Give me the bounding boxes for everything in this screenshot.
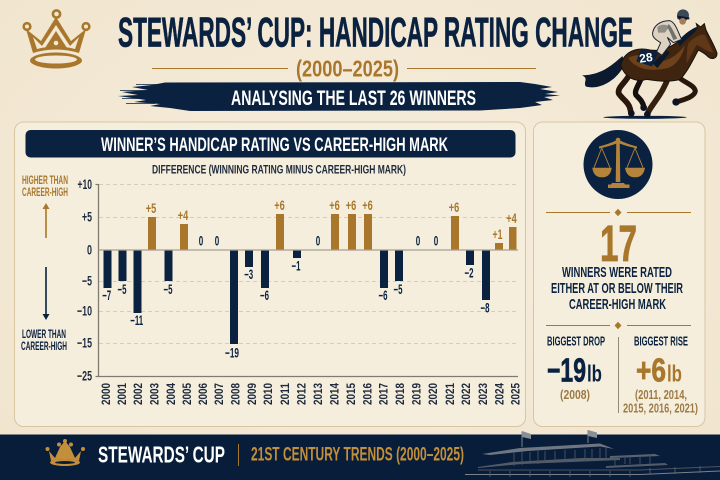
brush banner: analysing the last 26 winners: ANALYSING THE LAST 26 WINNERS [231, 87, 476, 110]
y axis labels: −15 [77, 336, 92, 350]
stat: biggest drop: BIGGEST DROP [547, 334, 605, 348]
icon: scales of justice [584, 130, 652, 199]
brush banner: analysing the last 26 winners [118, 82, 560, 111]
x axis year labels: 2013 [313, 383, 325, 405]
stat: biggest drop: −19 [547, 352, 586, 389]
negative value labels: −5 [118, 282, 127, 297]
stat: biggest rise: lb [667, 361, 682, 387]
y axis labels: +5 [82, 210, 92, 224]
x axis year labels: 2016 [362, 383, 374, 405]
arrow: up [42, 203, 50, 238]
x axis year labels: 2000 [101, 383, 113, 405]
label: higher than career-high: CAREER-HIGH [22, 187, 68, 199]
y axis labels [77, 177, 92, 384]
illustration: racehorse and jockey [582, 9, 717, 119]
positive value labels: +6 [346, 198, 357, 213]
negative value labels: −8 [480, 300, 490, 316]
zero value labels: 0 [416, 234, 420, 248]
negative value labels: −5 [164, 282, 173, 297]
x axis year labels: 2024 [494, 382, 506, 405]
zero value labels: 0 [316, 234, 320, 248]
negative value labels: −11 [130, 313, 143, 328]
y axis labels: −25 [77, 368, 92, 384]
illustration: racehorse and jockey: 28 [638, 50, 654, 66]
stat: biggest rise: (2011, 2014, [635, 388, 687, 402]
x axis year labels: 2004 [166, 382, 178, 405]
vertical divider [618, 337, 619, 413]
icon: footer crown [46, 439, 85, 466]
stat: biggest rise [623, 334, 698, 416]
subtitle: date range: (2000–2025) [296, 56, 399, 82]
positive value labels: +6 [449, 200, 460, 215]
x axis year labels: 2018 [395, 382, 407, 405]
negative value labels: −19 [225, 346, 239, 360]
panel: winner's rating chart [14, 122, 526, 426]
x axis year labels: 2023 [478, 383, 490, 405]
illustration: grandstand [465, 430, 720, 477]
positive value labels: +4 [506, 211, 517, 226]
x axis year labels: 2002 [133, 383, 145, 405]
x axis year labels: 2014 [330, 382, 342, 405]
positive value labels: +4 [178, 208, 189, 223]
negative value labels: −2 [464, 266, 474, 280]
x axis year labels: 2015 [346, 382, 358, 405]
chart heading: WINNER’S HANDICAP RATING VS CAREER-HIGH MARK [101, 134, 448, 156]
negative value labels: −1 [292, 258, 301, 274]
footer title: STEWARDS’ CUP [98, 442, 225, 468]
label: higher than career-high [22, 175, 68, 199]
x axis year labels [101, 382, 522, 405]
stat: biggest drop: (2008) [560, 388, 590, 402]
stat: biggest drop: lb [587, 361, 602, 387]
footer band [0, 430, 720, 480]
label: lower than career-high: LOWER THAN [22, 329, 66, 341]
chart heading [26, 130, 516, 158]
positive value labels: +6 [329, 198, 340, 213]
footer divider [238, 444, 239, 466]
stat description [551, 264, 683, 313]
x axis year labels: 2017 [378, 383, 390, 405]
negative value labels: −7 [102, 288, 111, 303]
negative value labels [102, 258, 490, 360]
negative value labels: −6 [378, 288, 388, 303]
x axis year labels: 2007 [214, 383, 226, 405]
negative value labels: −6 [260, 288, 269, 303]
positive value labels: +5 [146, 201, 157, 216]
stat: 17: 17 [600, 215, 637, 272]
icon: gold crown [24, 10, 89, 68]
x axis year labels: 2019 [412, 383, 424, 405]
bar chart [77, 177, 522, 405]
y axis labels: −10 [77, 304, 92, 318]
zero value labels: 0 [215, 234, 219, 248]
zero value labels: 0 [199, 234, 203, 248]
x axis year labels: 2009 [247, 383, 259, 405]
x axis year labels: 2020 [428, 383, 440, 405]
zero value labels: 0 [434, 234, 438, 248]
stat: biggest rise: +6 [636, 352, 666, 389]
x axis year labels: 2021 [445, 382, 457, 405]
x axis year labels: 2008 [230, 382, 242, 405]
negative value labels: −3 [244, 267, 253, 282]
label: higher than career-high: HIGHER THAN [22, 175, 68, 187]
label: lower than career-high [21, 329, 67, 353]
stat description: CAREER-HIGH MARK [569, 296, 666, 313]
zero value labels [199, 234, 438, 248]
positive value labels: +6 [362, 198, 373, 213]
x axis year labels: 2006 [198, 383, 210, 405]
divider with diamond [546, 209, 691, 216]
x axis year labels: 2011 [280, 382, 292, 405]
x axis year labels: 2003 [150, 383, 162, 405]
positive bars [148, 214, 516, 250]
x axis year labels: 2010 [263, 383, 275, 405]
x axis year labels: 2005 [182, 382, 194, 405]
positive value labels: +6 [274, 198, 285, 213]
divider with diamond [546, 322, 691, 329]
positive value labels [146, 198, 517, 242]
positive value labels: +1 [492, 227, 503, 242]
negative bars [104, 250, 490, 344]
x axis year labels: 2025 [510, 382, 522, 405]
x axis year labels: 2012 [296, 383, 308, 405]
footer subtitle: 21ST CENTURY TRENDS (2000–2025) [251, 445, 464, 466]
stat: biggest drop [547, 334, 605, 402]
y axis labels: 0 [87, 242, 92, 258]
label: lower than career-high: CAREER-HIGH [21, 341, 67, 353]
panel: key statistics [534, 122, 705, 426]
x axis year labels: 2001 [117, 382, 129, 405]
y axis labels: +10 [78, 177, 92, 192]
negative value labels: −5 [394, 282, 403, 297]
axes [96, 184, 518, 376]
arrow: down [42, 267, 50, 320]
y axis labels: −5 [82, 274, 92, 288]
x axis year labels: 2022 [461, 383, 473, 405]
chart subheading: DIFFERENCE (WINNING RATING MINUS CAREER-HIGH MARK) [152, 162, 406, 176]
